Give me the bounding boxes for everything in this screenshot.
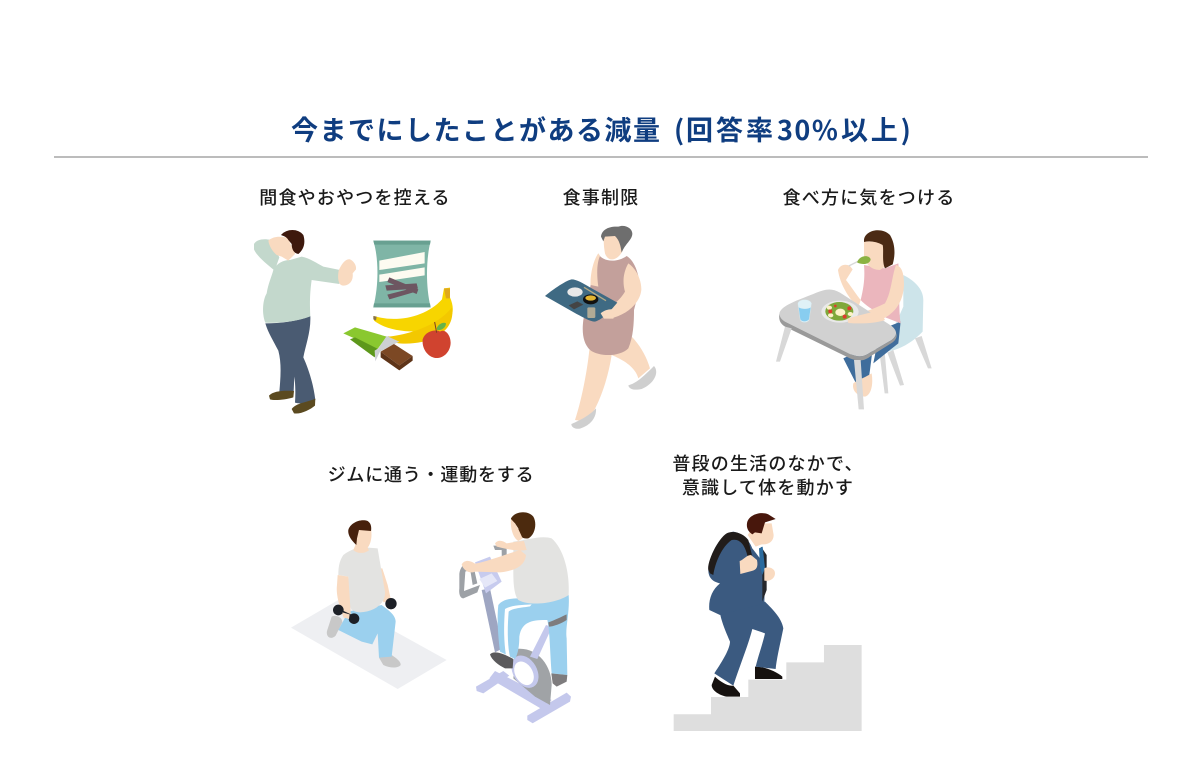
chair <box>879 275 932 393</box>
woman <box>838 230 904 397</box>
tray <box>545 279 617 322</box>
illustration: man on exercise bike <box>459 512 571 723</box>
label: snacks: 間食やおやつを控える <box>259 184 451 210</box>
illustration: man refusing snacks <box>254 230 453 414</box>
label: diet: 食事制限 <box>563 184 639 210</box>
stairs <box>674 645 862 731</box>
man <box>708 513 783 697</box>
label: everyday activity: 普段の生活のなかで、 <box>672 450 864 476</box>
dumbbells <box>333 598 397 624</box>
illustration: man lunging with dumbbells <box>291 520 447 689</box>
man <box>254 230 356 414</box>
title: ( <box>674 109 686 148</box>
title: 今までにしたことがある減量 <box>291 109 662 148</box>
legs and shoes <box>571 337 656 429</box>
apple <box>423 322 451 358</box>
glass of water <box>798 300 812 322</box>
exercise bike <box>459 546 571 723</box>
title: 回答率 <box>686 109 776 148</box>
title: 以上) <box>841 109 914 148</box>
title: 30% <box>777 109 839 148</box>
bananas <box>373 288 453 344</box>
illustration: businessman climbing stairs <box>674 513 862 731</box>
illustration: woman eating salad <box>776 230 932 409</box>
chocolate bar <box>343 327 413 370</box>
man <box>327 520 401 667</box>
salad plate <box>821 301 859 323</box>
label: everyday activity <box>672 450 864 500</box>
exercise mat <box>291 600 447 689</box>
table <box>776 290 897 409</box>
man <box>462 512 569 687</box>
label: everyday activity: 意識して体を動かす <box>682 474 854 500</box>
snack bag <box>373 241 431 307</box>
body and dress <box>583 226 641 355</box>
label: gym and exercise: ジムに通う・運動をする <box>328 461 534 487</box>
illustration: woman carrying tray <box>545 226 656 429</box>
label: how to eat: 食べ方に気をつける <box>783 184 955 210</box>
